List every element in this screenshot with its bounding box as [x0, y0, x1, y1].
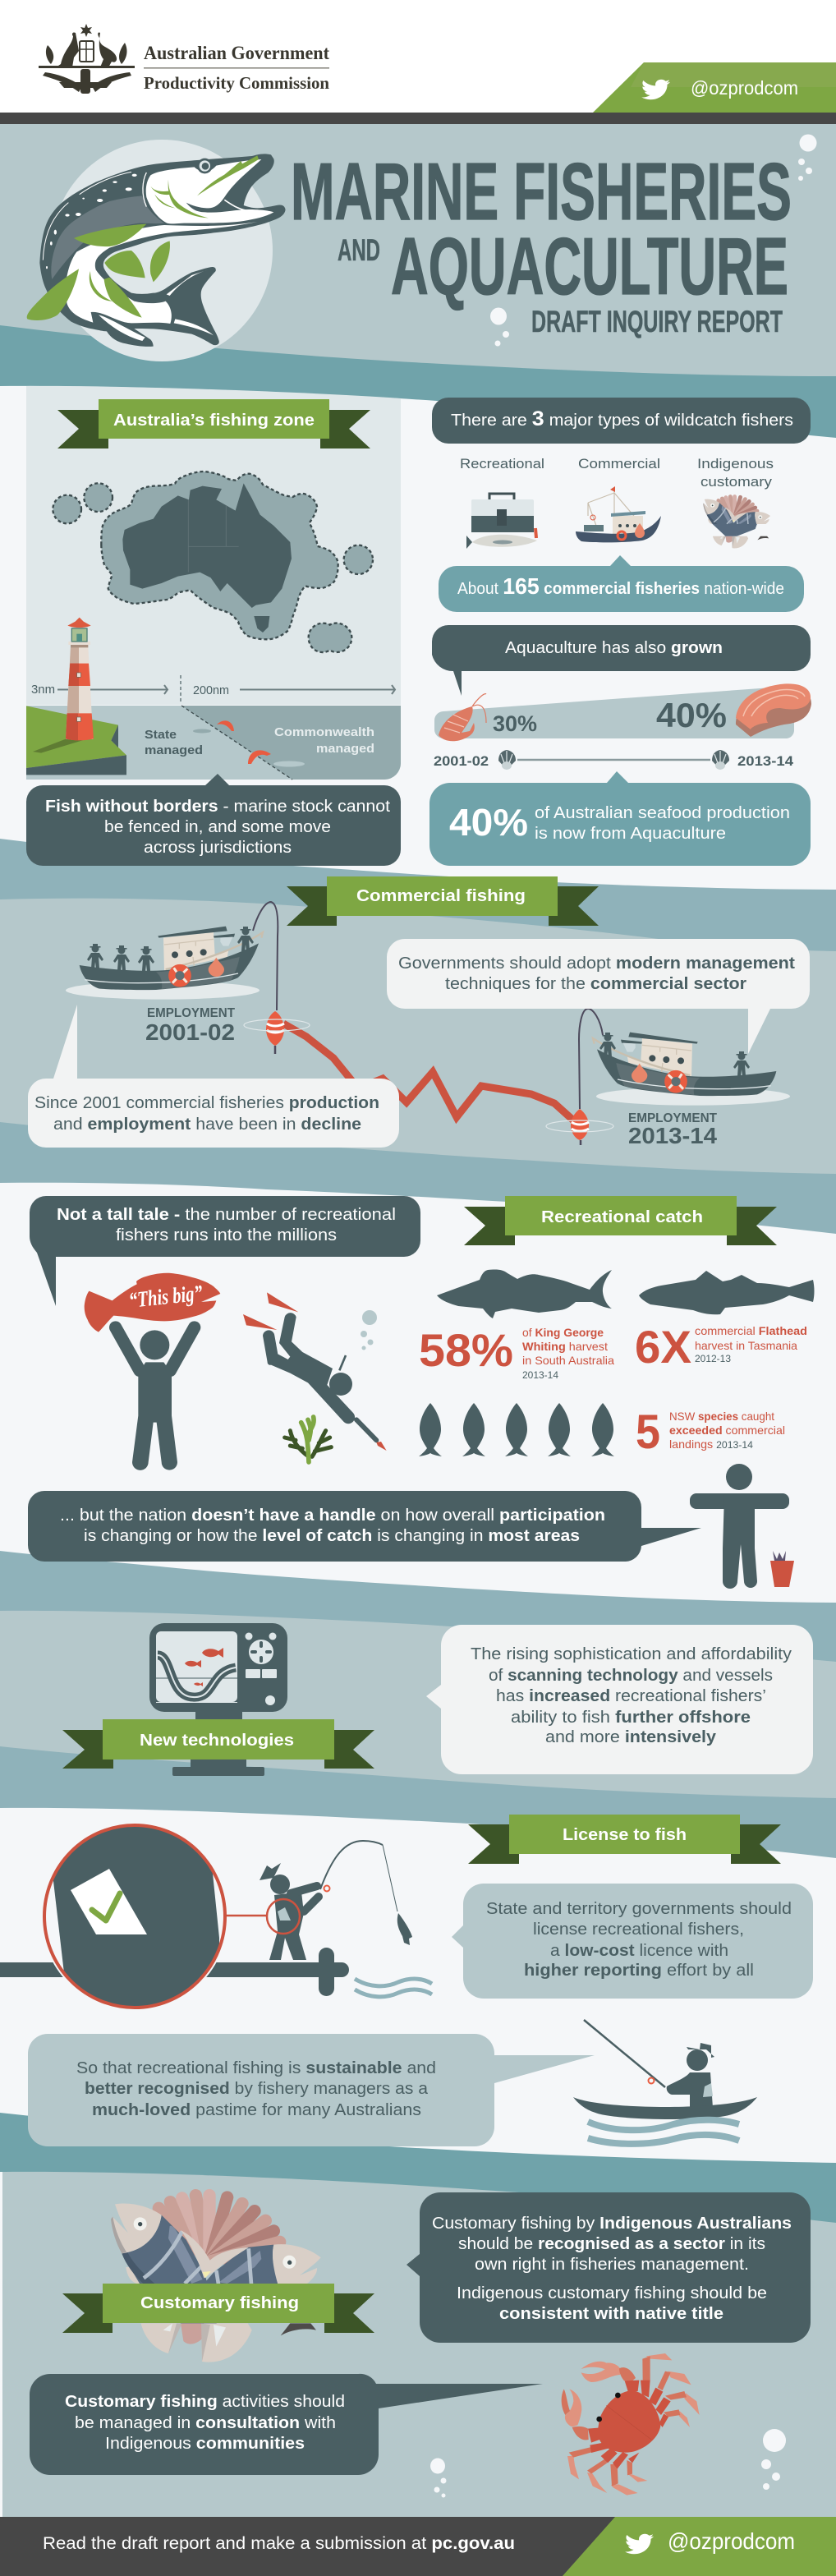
callout: scanning technology: and more intensively — [545, 1728, 717, 1746]
callout: modern management: Governments should adopt modern management — [398, 954, 795, 973]
callout: 40% of seafood production: 40% — [449, 801, 528, 844]
heading: customary fishing — [62, 2284, 374, 2333]
icon: angler on jetty — [260, 1841, 412, 1960]
icon: fish finder monitor — [149, 1623, 287, 1776]
callout: modern management — [387, 939, 810, 1054]
callout: sustainable recreational fishing — [28, 2034, 595, 2146]
icon: fishing rod 2013-14 — [579, 1009, 603, 1109]
callout: managed in consultation: Customary fishing activities should — [65, 2393, 345, 2411]
icon: waves — [355, 1979, 432, 1997]
heading: new technologies — [62, 1719, 374, 1769]
distance scale: 3nm and 200nm: 3nm — [31, 683, 55, 697]
text: government name — [144, 43, 329, 93]
text: government name: Australian Government — [144, 43, 329, 63]
label: employment 2013-14: 2013-14 — [628, 1123, 717, 1148]
stat: 6X flathead: harvest in Tasmania — [695, 1339, 797, 1352]
callout: scanning technology — [426, 1625, 813, 1774]
icon: jetty — [0, 1948, 349, 1996]
callout: indigenous australians: consistent with native title — [499, 2305, 723, 2323]
icon: coat of arms — [39, 24, 135, 94]
icon: customary fish and shell — [111, 2196, 321, 2362]
callout: indigenous australians: Customary fishing by Indigenous Australians — [432, 2215, 792, 2233]
stat: 6X flathead: commercial Flathead — [695, 1324, 807, 1337]
icon: float 2013-14 — [546, 1109, 613, 1145]
callout: managed in consultation: be managed in consultation with — [75, 2414, 336, 2432]
stat: 58% King George Whiting: Whiting harvest — [522, 1340, 608, 1353]
labels: state and commonwealth managed: State — [145, 728, 177, 742]
callout: fish without borders: across jurisdictions — [144, 839, 292, 857]
labels: state and commonwealth managed: managed — [316, 742, 374, 756]
text: government name: Productivity Commission — [144, 73, 329, 93]
stat: 58% King George Whiting: 2013-14 — [522, 1369, 558, 1381]
timeline: 2001-02 to 2013-14: 2013-14 — [737, 753, 794, 769]
label: employment 2001-02: 2001-02 — [145, 1019, 235, 1045]
callout: aquaculture has also grown — [432, 625, 811, 696]
icon: float 2001-02 — [244, 1011, 310, 1054]
stat: 6X flathead: 2012-13 — [695, 1353, 731, 1364]
icon: person holding fish: “This big” — [127, 1281, 204, 1313]
logo: Australian Government Productivity Commission — [39, 24, 329, 94]
map: exclusive economic zone — [53, 472, 373, 652]
callout: 40% of seafood production: of Australian seafood production — [535, 804, 790, 822]
icon: lighthouse — [66, 618, 94, 740]
callout: managed in consultation — [30, 2374, 543, 2475]
callout: sustainable recreational fishing: So that recreational fishing is sustainable and — [76, 2059, 436, 2077]
stat: 58% King George Whiting: 58% — [419, 1324, 513, 1376]
stat: 5 NSW species: exceeded commercial — [669, 1424, 785, 1437]
chart: aquaculture growth wedge — [434, 683, 811, 741]
chart: aquaculture growth wedge: 40% — [656, 696, 727, 734]
callout: not a tall tale: fishers runs into the millions — [116, 1226, 337, 1244]
icon: fishing trawler — [576, 486, 661, 542]
chart: declining production line — [283, 1024, 579, 1125]
footer: Read the draft report and make a submission at pc.gov.au — [43, 2534, 515, 2553]
label: employment 2001-02: EMPLOYMENT — [147, 1006, 235, 1020]
labels: state and commonwealth managed: Commonwealth — [274, 725, 374, 739]
callout: production decline — [28, 1005, 399, 1148]
stat: 58% King George Whiting — [419, 1324, 614, 1381]
timeline: 2001-02 to 2013-14: 2001-02 — [434, 753, 489, 769]
cliff — [26, 706, 126, 775]
icon: prawn — [439, 694, 486, 741]
title — [291, 146, 792, 338]
callout: license recreational fishers: State and territory governments should — [486, 1900, 792, 1918]
bubbles: diver — [361, 1310, 377, 1350]
heading: commercial fishing: Commercial fishing — [356, 887, 526, 905]
icon: fishing rod 2001-02 — [253, 902, 278, 1010]
twitter tag — [593, 62, 836, 113]
icon: King George whiting — [437, 1269, 612, 1318]
bubbles: bottom — [430, 2429, 786, 2497]
icon: person holding fish — [85, 1273, 220, 1470]
label: employment 2013-14: EMPLOYMENT — [628, 1111, 717, 1125]
callout: modern management: techniques for the commercial sector — [445, 975, 746, 993]
label: employment 2001-02 — [145, 1006, 235, 1045]
callout: fish without borders: Fish without borders - marine stock cannot — [45, 798, 390, 816]
labels: state and commonwealth managed — [145, 725, 374, 757]
callout: no handle on participation — [28, 1491, 701, 1562]
twitter tag: @ozprodcom — [691, 77, 798, 99]
footer — [0, 2517, 836, 2576]
labels: state and commonwealth managed: managed — [145, 743, 203, 757]
labels: fisher types: Recreational — [460, 456, 544, 472]
stat: 5 NSW species — [636, 1405, 785, 1459]
callout: scanning technology: The rising sophistication and affordability — [471, 1645, 792, 1663]
callout: fish without borders — [26, 774, 401, 866]
heading: Australia's fishing zone: Australia’s fishing zone — [113, 412, 315, 430]
callout: license recreational fishers — [452, 1884, 813, 1999]
icon: crab — [562, 2353, 700, 2496]
distance scale: 3nm and 200nm — [31, 675, 395, 702]
heading: recreational catch: Recreational catch — [541, 1208, 703, 1226]
icon: flathead — [639, 1271, 815, 1314]
icon: tackle box — [466, 494, 537, 549]
heading: Australia's fishing zone — [57, 399, 370, 448]
callout: license recreational fishers: higher reporting effort by all — [524, 1962, 754, 1980]
stat: 5 NSW species: 5 — [636, 1405, 660, 1459]
icon: salmon steak — [736, 683, 811, 737]
callout: sustainable recreational fishing: better recognised by fishery managers as a — [85, 2080, 429, 2098]
title: AND — [338, 233, 380, 267]
callout: production decline: Since 2001 commercial fisheries production — [34, 1094, 379, 1112]
callout: not a tall tale: Not a tall tale - the number of recreational — [57, 1206, 396, 1224]
timeline: 2001-02 to 2013-14 — [434, 750, 794, 770]
callout: three types of wildcatch fishers: There are 3 major types of wildcatch fishers — [451, 407, 793, 430]
callout: fish without borders: be fenced in, and some move — [104, 818, 331, 836]
icon: indigenous customary fish and shell — [703, 497, 770, 548]
icon: magnified licence — [41, 1822, 267, 2011]
callout: scanning technology: ability to fish further offshore — [511, 1709, 751, 1727]
dark header bar — [0, 113, 836, 124]
stat: 58% King George Whiting: of King George — [522, 1326, 604, 1339]
stat: 58% King George Whiting: in South Australia — [522, 1354, 614, 1367]
heading: new technologies: New technologies — [140, 1732, 294, 1750]
icon: spear diver — [243, 1292, 387, 1451]
heading: license to fish: License to fish — [563, 1826, 687, 1844]
callout: scanning technology: has increased recreational fishers’ — [496, 1687, 766, 1705]
icon: boat 2013-14 — [593, 1033, 790, 1106]
callout: 40% of seafood production — [429, 771, 811, 866]
callout: production decline: and employment have been in decline — [53, 1116, 361, 1134]
hero: fish illustration — [27, 140, 286, 361]
callout: no handle on participation: is changing or how the level of catch is changing in most areas — [84, 1527, 580, 1545]
chart: aquaculture growth wedge: 30% — [493, 711, 537, 736]
callout: license recreational fishers: a low-cost licence with — [550, 1942, 728, 1960]
callout: aquaculture has also grown: Aquaculture has also grown — [505, 639, 723, 657]
label: employment 2013-14 — [628, 1111, 717, 1148]
labels: fisher types — [460, 456, 774, 490]
distance scale: 3nm and 200nm: 200nm — [193, 683, 229, 697]
icons: five fish — [419, 1403, 614, 1456]
stat: 6X flathead: 6X — [635, 1321, 691, 1373]
callout: license recreational fishers: license recreational fishers, — [533, 1920, 744, 1939]
icon: seaweed — [285, 1417, 331, 1462]
callout: sustainable recreational fishing: much-loved pastime for many Australians — [92, 2101, 421, 2119]
stat: 5 NSW species: NSW species caught — [669, 1410, 774, 1423]
callout: managed in consultation: Indigenous communities — [105, 2435, 305, 2453]
callout: scanning technology: of scanning technology and vessels — [489, 1667, 773, 1685]
callout: 40% of seafood production: is now from Aquaculture — [535, 825, 726, 843]
heading: customary fishing: Customary fishing — [140, 2294, 299, 2312]
sea: state and commonwealth waters — [26, 705, 401, 780]
footer: @ozprodcom — [668, 2528, 795, 2554]
callout: no handle on participation: ... but the nation doesn’t have a handle on how overall participation — [60, 1506, 605, 1525]
callout: not a tall tale — [30, 1196, 420, 1306]
icon: angler in boat — [573, 2020, 757, 2144]
labels: fisher types: customary — [700, 474, 773, 490]
callout: indigenous australians: own right in fisheries management. — [475, 2256, 749, 2274]
stat: 6X flathead — [635, 1321, 807, 1373]
callout: indigenous australians: Indigenous customary fishing should be — [457, 2284, 767, 2302]
callout: three types of wildcatch fishers — [432, 398, 811, 444]
map: Australia — [122, 483, 292, 632]
callout: indigenous australians: should be recognised as a sector in its — [458, 2235, 765, 2253]
bubbles: hero — [490, 135, 816, 347]
heading: license to fish — [468, 1815, 781, 1864]
callout: 165 commercial fisheries — [439, 555, 804, 612]
stat: 5 NSW species: landings 2013-14 — [669, 1438, 753, 1451]
panel: Australia's fishing zone — [26, 386, 401, 780]
icon: person shrugging with catch bucket — [690, 1464, 794, 1589]
labels: fisher types: Indigenous — [697, 456, 774, 472]
icon: boat 2001-02 with crew — [66, 927, 263, 1000]
heading: recreational catch — [464, 1196, 777, 1245]
callout: indigenous australians — [407, 2192, 811, 2343]
callout: 165 commercial fisheries: About 165 commercial fisheries nation-wide — [457, 573, 784, 599]
labels: fisher types: Commercial — [578, 456, 660, 472]
heading: commercial fishing — [287, 876, 599, 926]
